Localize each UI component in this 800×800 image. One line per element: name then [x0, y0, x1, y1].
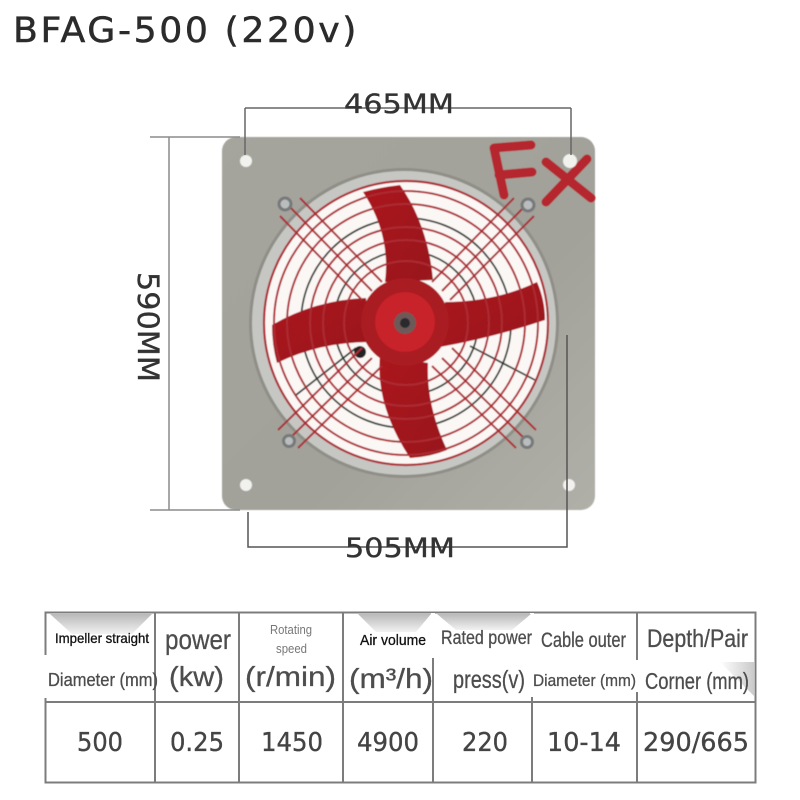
- header row: Diameter (mm): [533, 671, 636, 690]
- specification table: [44, 612, 756, 782]
- header row: power: [165, 624, 231, 655]
- header row: (m³/h): [349, 663, 433, 694]
- value row: 500: [77, 728, 123, 758]
- guard bolts: [279, 198, 534, 448]
- value row: 4900: [357, 728, 419, 758]
- header row: (kw): [169, 661, 224, 692]
- dimension: 505MM width: 505MM: [345, 533, 455, 564]
- header row: Corner (mm): [645, 668, 749, 694]
- value row: 10-14: [547, 728, 621, 758]
- dimension: 465MM width: [245, 89, 571, 155]
- table grid: [45, 612, 756, 782]
- header row: Air volume: [360, 632, 426, 649]
- black rear guard: [296, 218, 535, 428]
- dimension: 465MM width: 465MM: [344, 89, 454, 120]
- header row: speed: [276, 641, 307, 656]
- dimension: 505MM width: [248, 335, 567, 564]
- panel: fan product photo: [222, 137, 595, 510]
- header row: Depth/Pair: [647, 625, 748, 653]
- header cell shading: [44, 613, 754, 698]
- Ex mark: [494, 145, 591, 202]
- header row: (r/min): [245, 661, 336, 692]
- value row: 1450: [261, 728, 323, 758]
- dimension: 590MM height: [131, 137, 240, 510]
- value row: 0.25: [170, 728, 224, 758]
- mounting plate: [222, 137, 595, 510]
- fan housing ring: [249, 168, 559, 478]
- fan blades: [272, 185, 545, 458]
- value row: [77, 728, 749, 758]
- header row: Impeller straight: [55, 630, 149, 646]
- title: BFAG-500 (220v): [13, 11, 359, 51]
- red front guard: [264, 181, 548, 465]
- fan hub: [354, 278, 449, 366]
- header row: Cable outer: [541, 629, 626, 652]
- header row: Diameter (mm): [48, 670, 158, 690]
- header row: press(v): [453, 666, 525, 694]
- value row: 290/665: [643, 728, 749, 758]
- dimension: 590MM height: 590MM: [131, 272, 165, 382]
- header row: [48, 622, 749, 694]
- header row: Rotating: [270, 622, 312, 637]
- mounting holes: [240, 154, 577, 491]
- header row: Rated power: [441, 628, 533, 649]
- value row: 220: [462, 728, 508, 758]
